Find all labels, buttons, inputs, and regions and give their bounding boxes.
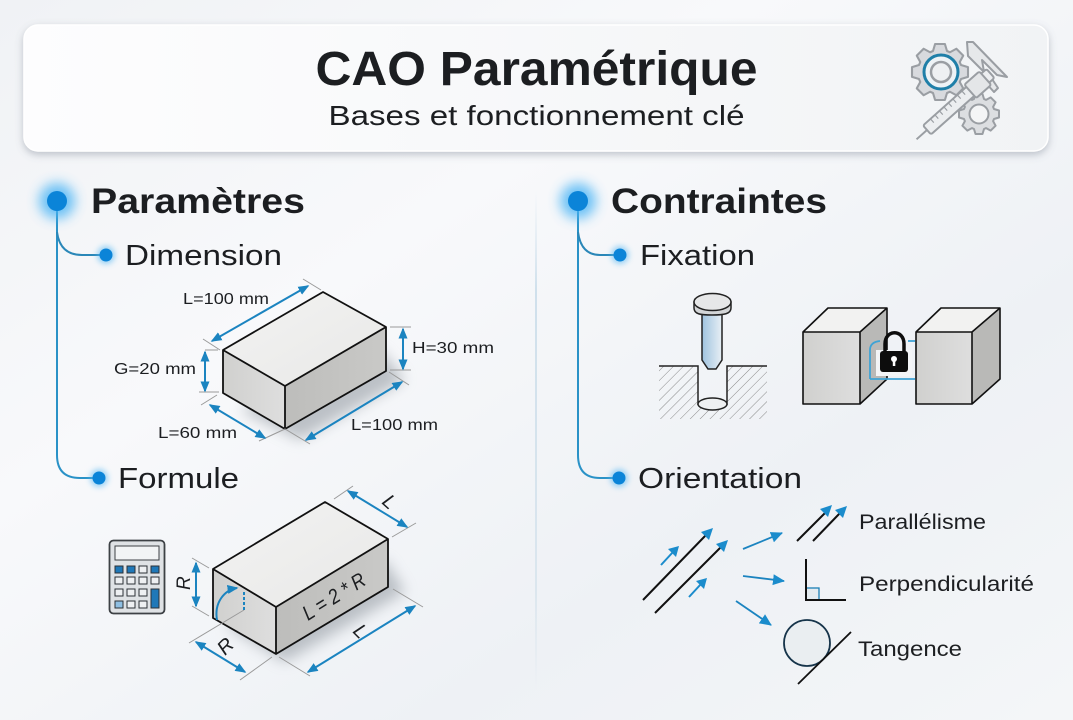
dimension labels: L=100 mm xyxy=(183,291,269,308)
subtitle: Bases et fonctionnement clé xyxy=(328,100,744,131)
label: formule: Formule xyxy=(118,463,239,495)
icon: gears and caliper xyxy=(911,42,1007,146)
constraint: perpendicularité: Perpendicularité xyxy=(859,573,1034,596)
constraint: tangence: Tangence xyxy=(858,638,962,661)
constraint: perpendicularité xyxy=(806,559,1034,600)
dimension labels: G=20 mm xyxy=(114,361,196,378)
panel: contraintes xyxy=(560,182,1034,684)
dimensioned block xyxy=(114,279,494,444)
timeline: contraintes xyxy=(560,183,629,487)
heading: paramètres: Paramètres xyxy=(91,182,305,221)
label: orientation: Orientation xyxy=(638,463,802,495)
heading: contraintes: Contraintes xyxy=(611,182,827,221)
icon: locked blocks xyxy=(803,308,1000,404)
dimension labels xyxy=(114,291,494,442)
dimension labels: L=60 mm xyxy=(158,425,237,442)
constraint: parallélisme xyxy=(797,505,986,541)
dimension labels: L=100 mm xyxy=(351,417,438,434)
formula labels: L = 2 * R xyxy=(298,569,370,625)
arrows to constraint types xyxy=(736,533,784,625)
title: CAO Paramétrique xyxy=(316,43,758,96)
formula labels xyxy=(174,490,401,660)
formula labels: R xyxy=(213,634,239,660)
formula block xyxy=(174,486,423,680)
panel: paramètres xyxy=(39,182,494,680)
title banner xyxy=(24,25,1048,151)
dimension labels: H=30 mm xyxy=(412,340,494,357)
icon: calculator xyxy=(110,540,164,614)
icon: parallel lines source xyxy=(643,528,728,613)
formula labels: L xyxy=(348,620,372,643)
constraint: tangence xyxy=(784,620,962,684)
label: fixation: Fixation xyxy=(640,240,755,272)
icon: pin and hole xyxy=(659,294,767,419)
constraint: parallélisme: Parallélisme xyxy=(859,511,986,534)
formula labels: L xyxy=(378,490,401,514)
label: dimension: Dimension xyxy=(125,240,282,272)
formula labels: R xyxy=(174,576,195,590)
timeline: paramètres xyxy=(39,183,115,487)
